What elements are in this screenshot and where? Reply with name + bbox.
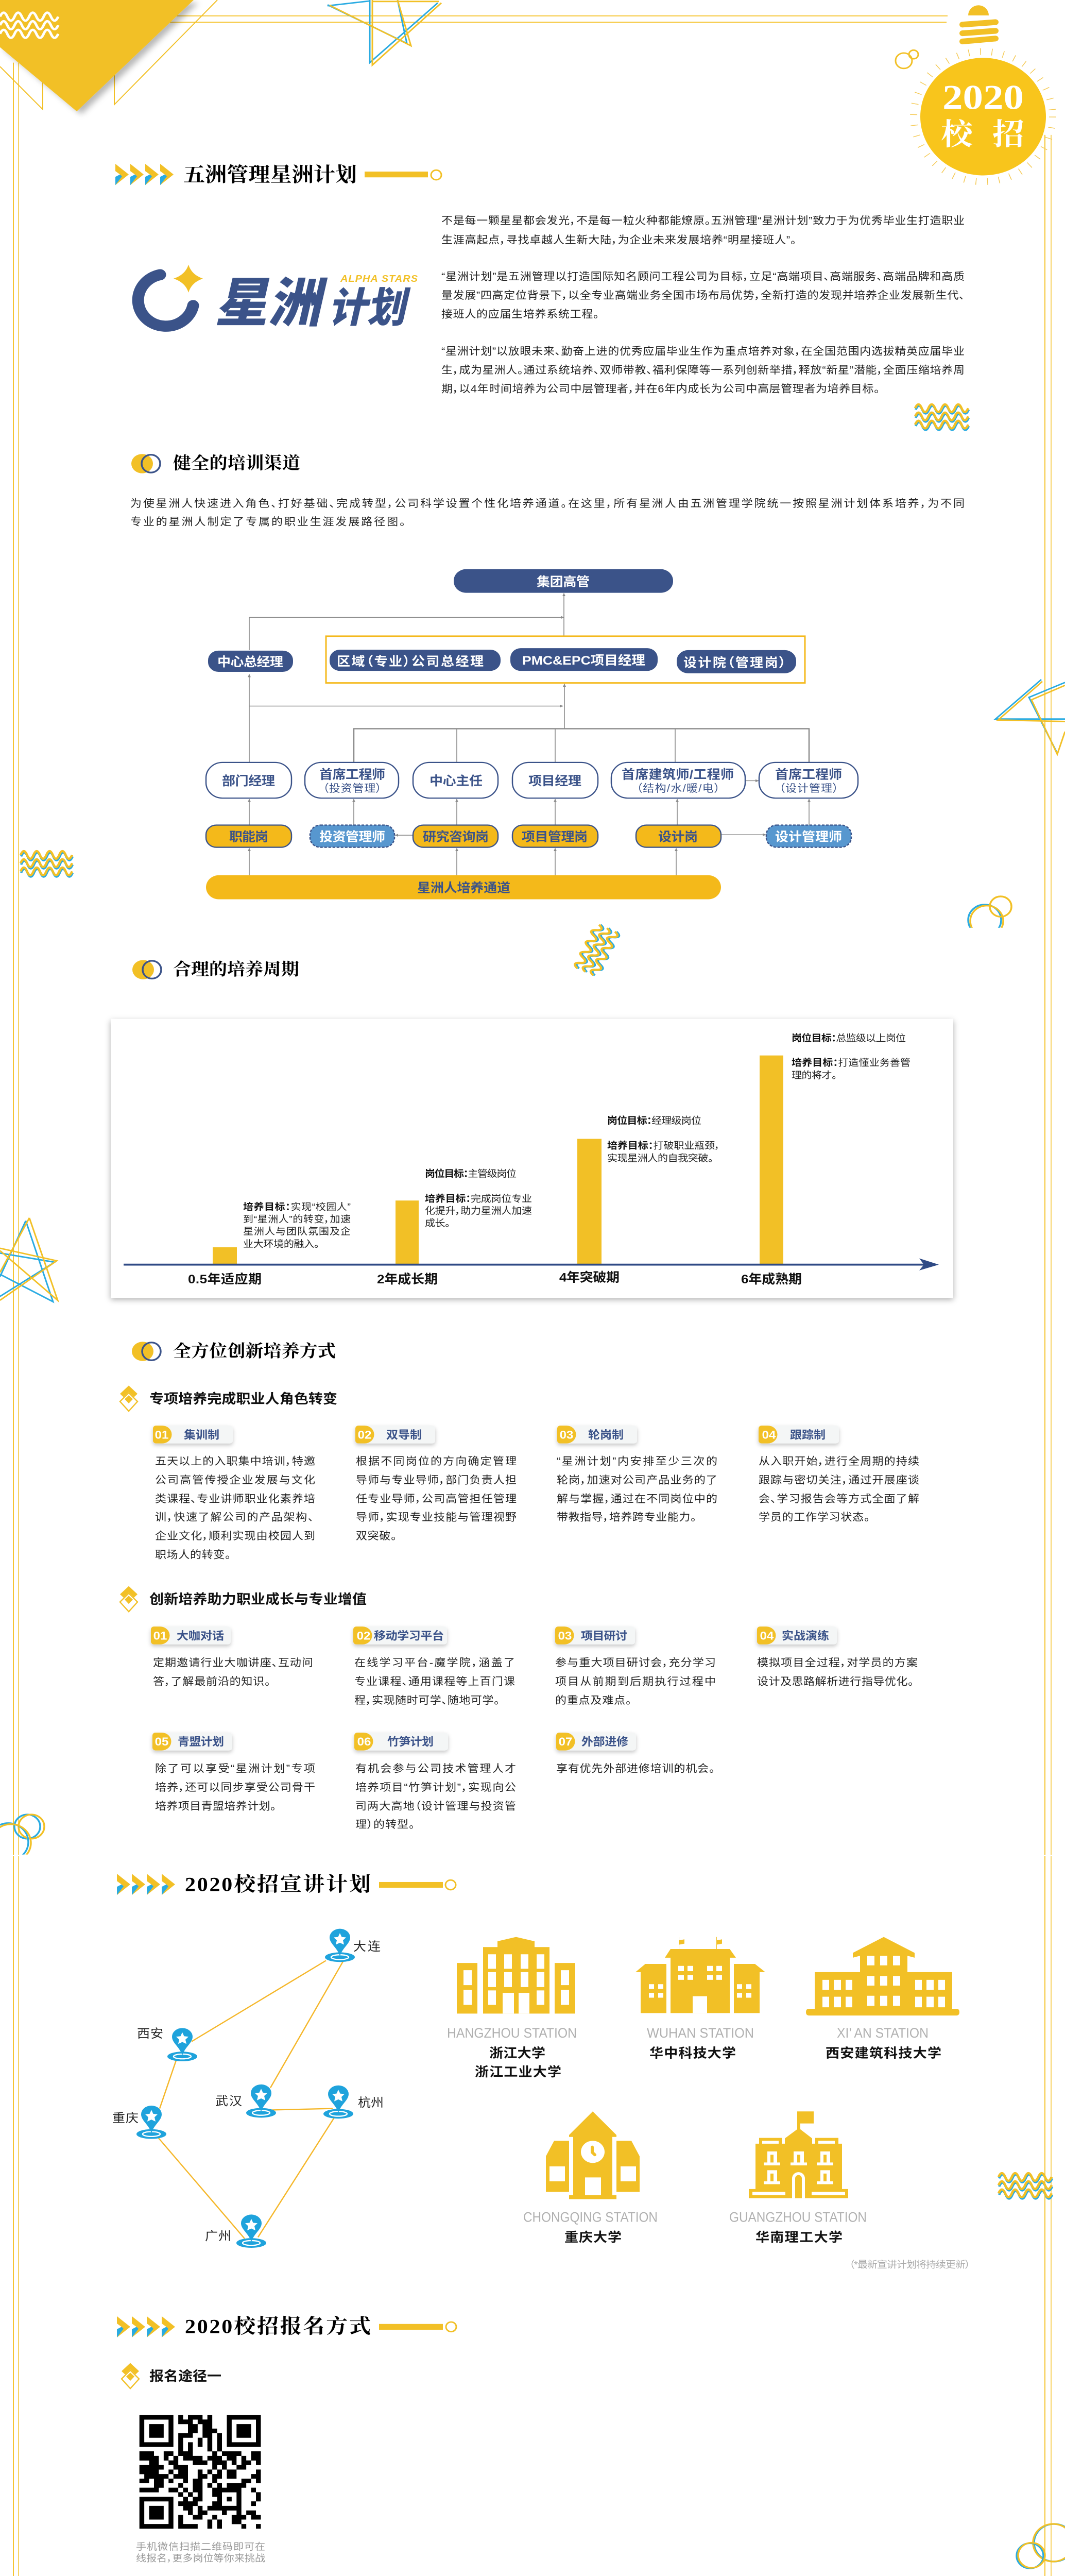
labels: position nodes: 部门经理 [222,774,275,788]
item: 跟踪制: 从入职开始，进行全周期的持续 [759,1455,919,1467]
item: 轮岗制: 解与掌握，通过在不同岗位中的 [557,1493,717,1505]
item: 轮岗制: “星洲计划”内安排至少三次的 [557,1455,717,1467]
subheading: 专项培养完成职业人角色转变: 专项培养完成职业人角色转变 [149,1391,337,1406]
item: 轮岗制: 轮岗制 [588,1429,624,1441]
text: 2 year goals: 成长。 [425,1218,450,1229]
item: 项目研讨: 的重点及难点。 [555,1694,631,1706]
labels: position nodes: 首席工程师 [775,768,842,782]
item: 跟踪制 [759,1426,919,1523]
pin: 杭州 [323,2086,384,2119]
item: 外部进修: 外部进修 [581,1736,628,1748]
logo: 星洲计划: ALPHA STARS [340,274,418,284]
item: 移动学习平台: 专业课程、通用课程等上百门课 [354,1675,515,1687]
item: 跟踪制: 04 [762,1428,776,1441]
item: 实战演练 [757,1626,918,1687]
subheading: 创新培养助力职业成长与专业增值 [120,1586,367,1612]
decoration: light bulb [963,5,995,41]
QR code [140,2417,261,2527]
axis labels: 4年突破期 [559,1270,620,1284]
node: 设计院（管理岗） [677,650,796,673]
pin: 西安 [137,2027,197,2061]
caption: scan to apply [136,2541,265,2564]
labels: position nodes: 中心主任 [430,774,483,788]
node: 区域（专业）公司总经理 [330,650,501,671]
pin: 大连 [325,1929,381,1962]
decoration: right star [995,680,1065,754]
text block: introduction [441,215,965,395]
decoration: left rings [0,1814,45,1855]
text block: introduction: 期，以4年时间培养为公司中层管理者，并在6年内成长为公司中高层管理者为培养目标。 [441,383,880,395]
text: 4 year goals: 实现星洲人的自我突破。 [607,1153,713,1164]
item: 竹笋计划 [354,1733,516,1831]
label: Xi'an station: 西安建筑科技大学 [826,2045,941,2060]
label: Xi'an station [826,2025,941,2060]
caption: scan to apply: 线报名，更多岗位等你来挑战 [136,2553,265,2564]
subheading: 报名途径一 [122,2363,221,2389]
heading: 2020校招宣讲计划 [117,1873,456,1895]
decoration: left star [0,1218,58,1302]
item: 青盟计划: 培养，还可以同步享受公司骨干 [155,1782,315,1793]
heading: 合理的培养周期: 合理的培养周期 [173,960,299,979]
text block: introduction: 生，成为星洲人。通过系统培养、双师带教、福利保障等一系列创新举措，释放“新星”潜能，全面压缩培养周 [441,364,965,376]
labels: post nodes: 设计岗 [658,830,698,844]
item: 项目研讨 [555,1626,716,1706]
item: 集训制: 01 [155,1428,168,1441]
pin: 广州: 广州 [205,2230,231,2243]
text block: training channel: 为使星洲人快速进入角色、打好基础、完成转型，公司科学设置个性化培养通道。在这里，所有星洲人由五洲管理学院统一按照星洲计划体系培养，为不同 [130,498,965,510]
item: 项目研讨: 03 [558,1629,572,1642]
text block: introduction: 接班人的应届生培养系统工程。 [441,308,599,320]
item: 集训制: 企业文化，顺利实现由校园人到 [155,1530,315,1542]
label: Hangzhou station: HANGZHOU STATION [447,2025,577,2041]
pin: 西安: 西安 [137,2027,163,2041]
item: 实战演练: 04 [760,1629,774,1642]
chart: career path flow [206,569,858,900]
node: 区域（专业）公司总经理: 区域（专业）公司总经理 [337,655,484,669]
node: 设计院（管理岗）: 设计院（管理岗） [683,656,786,670]
heading: 2020校招报名方式: 2020校招报名方式 [185,2315,371,2337]
labels: position nodes [222,768,842,794]
text: 4 year goals: 岗位目标：经理级岗位 [607,1115,701,1126]
note: update notice: （*最新宣讲计划将持续更新） [849,2260,970,2270]
item: 青盟计划: 除了可以享受“星洲计划”专项 [155,1762,315,1774]
labels: post nodes [229,830,842,844]
item: 外部进修: 享有优先外部进修培训的机会。 [556,1762,715,1774]
text: 6 year goals: 理的将才。 [792,1070,837,1081]
pin: 重庆 [112,2106,166,2139]
bars [213,1056,783,1265]
text: 0.5 year goals: 业大环境的融入。 [243,1239,319,1250]
labels: position nodes: 首席工程师 [319,768,385,782]
bar: 星洲人培养通道: 星洲人培养通道 [417,881,510,895]
text block: introduction: 生涯高起点，寻找卓越人生新大陆，为企业未来发展培养“明星接班人”。 [441,234,796,246]
text: 4 year goals [607,1115,720,1164]
item: 移动学习平台: 02 [357,1629,370,1642]
decoration: waves [915,404,969,430]
item: 竹笋计划: 理）的转型。 [355,1819,415,1831]
item: 跟踪制: 跟踪与密切关注，通过开展座谈 [759,1474,919,1486]
labels: post nodes: 设计管理师 [775,830,842,844]
item: 双导制: 双突破。 [356,1530,397,1542]
heading: 五洲管理星洲计划 [115,164,441,186]
item: 集训制: 五天以上的入职集中培训，特邀 [155,1455,315,1467]
icon: Wuhan building [635,1937,765,2013]
item: 轮岗制: 03 [560,1428,573,1441]
item: 大咖对话: 答，了解最前沿的知识。 [153,1675,270,1687]
text: 0.5 year goals: 到“星洲人”的转变，加速 [243,1214,351,1225]
item: 双导制: 导师与专业导师，部门负责人担 [356,1474,517,1486]
labels: position nodes: 首席建筑师/工程师 [622,768,734,782]
axis labels [188,1270,802,1286]
item: 青盟计划: 青盟计划 [178,1736,224,1748]
item: 项目研讨: 参与重大项目研讨会，充分学习 [555,1657,716,1669]
text: 6 year goals: 培养目标：打造懂业务善管 [792,1057,911,1069]
item: 双导制 [355,1426,517,1542]
text: 2 year goals: 培养目标：完成岗位专业 [425,1193,532,1205]
label: Wuhan station: WUHAN STATION [647,2025,754,2041]
badge: 2020 校招 [914,52,1053,182]
item: 大咖对话: 大咖对话 [177,1630,224,1642]
route lines [158,1960,343,2239]
item: 集训制: 公司高管传授企业发展与文化 [155,1474,315,1486]
text: 6 year goals [792,1032,911,1081]
item: 集训制 [153,1426,315,1561]
icon: Xi'an building [806,1937,959,2015]
label: Guangzhou station: 华南理工大学 [755,2230,843,2245]
pin: 重庆: 重庆 [112,2112,139,2125]
item: 竹笋计划: 竹笋计划 [387,1736,434,1748]
text block: introduction: “星洲计划”以放眼未来、勤奋上进的优秀应届毕业生作为重点培养对象，在全国范围内选拔精英应届毕业 [441,345,965,357]
chart: station map [112,1929,384,2248]
pin: 武汉: 武汉 [215,2095,242,2108]
bar: 星洲人培养通道 [206,875,721,900]
axis labels: 0.5年适应期 [188,1272,262,1286]
text: 0.5 year goals [243,1201,351,1250]
item: 实战演练: 模拟项目全过程，对学员的方案 [757,1657,918,1669]
panel: growth cycle chart [111,1019,953,1298]
label: Chongqing station: CHONGQING STATION [523,2209,658,2225]
labels: position nodes: （设计管理） [779,783,838,794]
badge: 2020 校招: 2020 [942,78,1024,117]
logo: 星洲计划 [138,265,418,333]
pin: 武汉 [215,2084,276,2117]
item: 实战演练: 设计及思路解析进行指导优化。 [757,1675,914,1687]
text block: introduction: 量发展”四高定位背景下，以全专业高端业务全国市场布局优势，全新打造的发现并培养企业发展新生代、 [441,290,965,301]
item: 竹笋计划: 司两大高地（设计管理与投资管 [355,1800,516,1812]
labels: position nodes: （投资管理） [323,783,382,794]
item: 移动学习平台: 程，实现随时可学、随地可学。 [354,1694,500,1706]
item: 大咖对话: 定期邀请行业大咖讲座、互动问 [153,1657,313,1669]
pin: 杭州: 杭州 [358,2096,384,2110]
decoration: rings [967,895,1012,928]
subheading: 报名途径一: 报名途径一 [149,2368,221,2384]
text block: training channel: 专业的星洲人制定了专属的职业生涯发展路径图。 [130,516,405,528]
node: PMC&EPC项目经理: PMC&EPC项目经理 [522,654,645,668]
item: 大咖对话: 01 [153,1629,167,1642]
icon: Chongqing building [546,2111,640,2199]
axis arrow [124,1258,939,1270]
label: Hangzhou station [447,2025,577,2079]
label: Hangzhou station: 浙江大学 [489,2045,545,2060]
node: 集团高管 [454,569,673,593]
item: 竹笋计划: 有机会参与公司技术管理人才 [355,1762,516,1774]
text: 4 year goals: 培养目标：打破职业瓶颈， [607,1140,720,1151]
decoration: waves left [21,851,73,877]
item: 轮岗制: 轮岗，加速对公司产品业务的了 [557,1474,717,1486]
item: 双导制: 导师，实现专业技能与管理视野 [356,1511,517,1523]
item: 跟踪制: 会、学习报告会等方式全面了解 [759,1493,919,1505]
item: 双导制: 根据不同岗位的方向确定管理 [356,1455,517,1467]
pin: 大连: 大连 [353,1940,381,1954]
icon: Hangzhou building [457,1937,575,2013]
item: 跟踪制: 跟踪制 [790,1429,826,1441]
subheading: 专项培养完成职业人角色转变 [120,1385,337,1412]
item: 实战演练: 实战演练 [782,1629,829,1642]
pin: 广州 [205,2214,266,2248]
heading: 五洲管理星洲计划: 五洲管理星洲计划 [183,164,357,186]
text block: training channel [130,498,965,528]
labels: post nodes: 投资管理师 [319,830,385,844]
decoration: top-left triangle [0,0,217,111]
text block: introduction: 不是每一颗星星都会发光，不是每一粒火种都能燎原。五洲管理“星洲计划”致力于为优秀毕业生打造职业 [441,215,965,227]
item: 移动学习平台: 在线学习平台-魔学院，涵盖了 [354,1657,515,1669]
decoration: top star [328,0,441,65]
item: 青盟计划: 培养项目青盟培养计划。 [155,1800,276,1812]
item: 青盟计划 [152,1733,315,1812]
item: 集训制: 训，快速了解公司的产品架构、 [155,1511,314,1523]
label: Hangzhou station: 浙江工业大学 [475,2064,561,2079]
item: 集训制: 集训制 [184,1429,219,1441]
arrows and connectors [249,594,809,875]
logo: 星洲计划: 计划 [326,285,414,331]
item: 青盟计划: 05 [155,1735,168,1748]
item: 双导制: 双导制 [386,1429,422,1441]
row: post nodes [206,825,851,848]
node: 中心总经理 [208,651,293,672]
axis labels: 2年成长期 [377,1273,438,1286]
decoration: rotated waves [574,923,621,977]
icon: Guangzhou building [749,2111,848,2198]
label: Guangzhou station: GUANGZHOU STATION [729,2209,867,2225]
labels: post nodes: 研究咨询岗 [423,830,489,844]
item: 外部进修 [556,1733,715,1774]
labels: position nodes: 项目经理 [528,774,581,788]
caption: scan to apply: 手机微信扫描二维码即可在 [136,2541,265,2552]
row: position nodes [206,762,858,798]
item: 竹笋计划: 06 [357,1735,371,1748]
item: 项目研讨: 项目从前期到后期执行过程中 [555,1675,716,1687]
decoration: waves right [999,2173,1052,2199]
label: Wuhan station [647,2025,754,2060]
item: 轮岗制 [557,1426,717,1523]
node: 集团高管: 集团高管 [537,575,590,589]
item: 跟踪制: 学员的工作学习状态。 [759,1511,870,1523]
text: 2 year goals [425,1168,532,1229]
axis labels: 6年成熟期 [741,1272,802,1286]
text: 6 year goals: 岗位目标：总监级以上岗位 [792,1032,906,1044]
text: 0.5 year goals: 培养目标：实现“校园人” [243,1201,351,1213]
label: Xi'an station: XI’ AN STATION [837,2025,929,2041]
label: Guangzhou station [729,2209,867,2245]
text: 0.5 year goals: 星洲人与团队氛围及企 [243,1226,351,1237]
decoration: bottom-right rings [1017,2524,1065,2568]
item: 轮岗制: 带教指导，培养跨专业能力。 [557,1511,696,1523]
node: 中心总经理: 中心总经理 [217,655,283,669]
labels: post nodes: 职能岗 [229,830,268,844]
item: 大咖对话 [151,1626,313,1687]
item: 双导制: 02 [358,1428,371,1441]
labels: post nodes: 项目管理岗 [522,830,588,844]
node: PMC&EPC项目经理 [510,648,658,671]
logo: 星洲计划: 星洲 [212,273,332,333]
item: 项目研讨: 项目研讨 [581,1630,627,1642]
badge: 2020 校招: 招 [992,118,1024,151]
item: 集训制: 职场人的转变。 [155,1549,231,1561]
subheading: 创新培养助力职业成长与专业增值: 创新培养助力职业成长与专业增值 [149,1591,367,1607]
frame: senior managers [326,636,805,683]
heading: 2020校招报名方式 [117,2315,456,2337]
item: 竹笋计划: 培养项目“竹笋计划”，实现向公 [355,1782,516,1793]
text: 2 year goals: 岗位目标：主管级岗位 [425,1168,517,1179]
label: Chongqing station [523,2209,658,2245]
item: 双导制: 任专业导师，公司高管担任管理 [356,1493,517,1505]
label: Wuhan station: 华中科技大学 [649,2045,736,2060]
text block: introduction: “星洲计划”是五洲管理以打造国际知名顾问工程公司为目标，立足“高端项目、高端服务、高端品牌和高质 [441,270,965,282]
heading: 全方位创新培养方式: 全方位创新培养方式 [173,1342,336,1361]
item: 外部进修: 07 [559,1735,572,1748]
heading: 健全的培训渠道: 健全的培训渠道 [173,454,300,473]
item: 移动学习平台 [353,1626,515,1706]
badge: 2020 校招: 校 [941,118,975,151]
item: 集训制: 类课程、专业讲师职业化素养培 [155,1493,315,1505]
text: 2 year goals: 化提升，助力星洲人加速 [425,1206,532,1216]
item: 移动学习平台: 移动学习平台 [374,1629,444,1642]
heading: 2020校招宣讲计划: 2020校招宣讲计划 [185,1873,371,1895]
labels: position nodes: （结构/水/暖/电） [637,783,720,794]
decoration: rings [896,50,918,69]
label: Chongqing station: 重庆大学 [564,2230,622,2245]
